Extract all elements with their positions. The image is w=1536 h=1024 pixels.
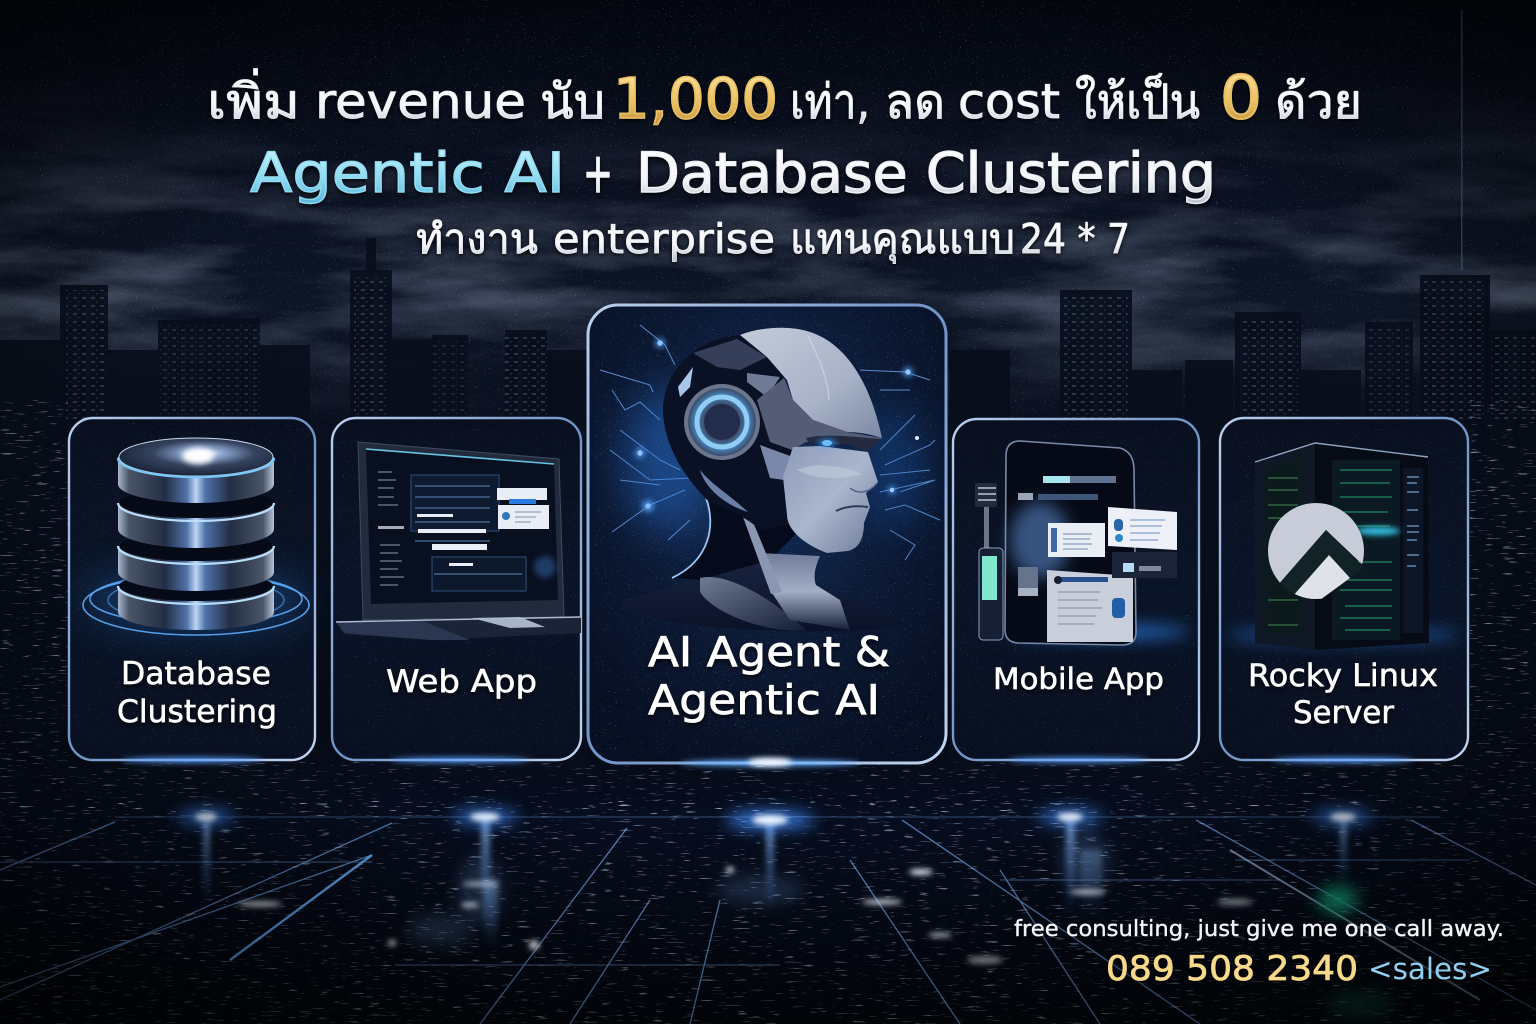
label: database clustering [117, 656, 277, 730]
collar [700, 577, 806, 630]
phone number [1106, 949, 1492, 989]
headline line 3: 24 * 7 [1020, 215, 1130, 263]
icon: robot head [622, 328, 906, 631]
contact block [1014, 917, 1504, 989]
panel: ai agent [588, 305, 946, 766]
icon: neural network lines [600, 325, 940, 560]
label: rocky linux server: Server [1293, 695, 1394, 731]
label: ai agent: AI Agent & [648, 628, 890, 676]
icon: rocky linux logo [1268, 503, 1364, 600]
headline line 2: Agentic AI [250, 141, 565, 205]
label: rocky linux server: Rocky Linux [1248, 658, 1438, 694]
panel: web app [332, 418, 581, 762]
dark neck back [672, 490, 800, 580]
headline line 1: เท่า, [790, 74, 870, 130]
label: ai agent: Agentic AI [648, 676, 880, 724]
icon: database cylinder [83, 438, 309, 635]
headline line 3: ทำงาน [416, 215, 538, 263]
heading [207, 63, 1362, 264]
upper skull [740, 328, 882, 438]
headline line 1: ด้วย [1275, 74, 1362, 130]
shoulders [622, 556, 906, 631]
label: database clustering: Clustering [117, 694, 277, 730]
face [783, 446, 878, 553]
background: city skyline [0, 10, 1536, 812]
headline line 1: 1,000 [613, 67, 778, 132]
headline line 3 [416, 215, 1130, 264]
headline line 1: cost [958, 74, 1060, 130]
headline line 2: Database Clustering [636, 141, 1216, 205]
label: mobile app: Mobile App [993, 662, 1164, 696]
ear ring [684, 384, 760, 460]
headline line 1: ให้เป็น [1075, 73, 1200, 130]
headline line 1: นับ [540, 74, 605, 130]
headline line 1: เพิ่ม [207, 68, 300, 130]
background: glowing data floor [0, 800, 1536, 1024]
label: rocky linux server [1248, 658, 1438, 731]
headline line 1: revenue [315, 74, 526, 130]
dark helmet [663, 335, 793, 530]
tagline: free consulting, just give me one call away. [1014, 917, 1504, 942]
headline line 1: ลด [885, 74, 945, 130]
helmet panels [693, 339, 767, 370]
icon: server rack with rocky logo [1225, 443, 1461, 650]
panel: database clustering [69, 418, 315, 762]
headline line 3: แทนคุณแบบ [790, 215, 1015, 264]
headline line 1: 0 [1220, 63, 1262, 133]
phone number: <sales> [1368, 952, 1492, 986]
phone number: 089 508 2340 [1106, 949, 1358, 989]
label: database clustering: Database [121, 656, 271, 692]
headline line 2 [250, 141, 1216, 205]
label: web app: Web App [386, 664, 537, 700]
headline line 3: enterprise [553, 215, 775, 263]
icon: laptop [336, 442, 581, 640]
headline line 1 [207, 63, 1362, 133]
panel: mobile app [953, 419, 1199, 762]
headline line 2: + [583, 141, 613, 205]
label: ai agent [648, 628, 890, 724]
neck [760, 553, 850, 630]
brow [806, 436, 880, 451]
icon: smartphone with app cards [975, 441, 1190, 645]
panel: rocky linux server [1220, 418, 1468, 762]
